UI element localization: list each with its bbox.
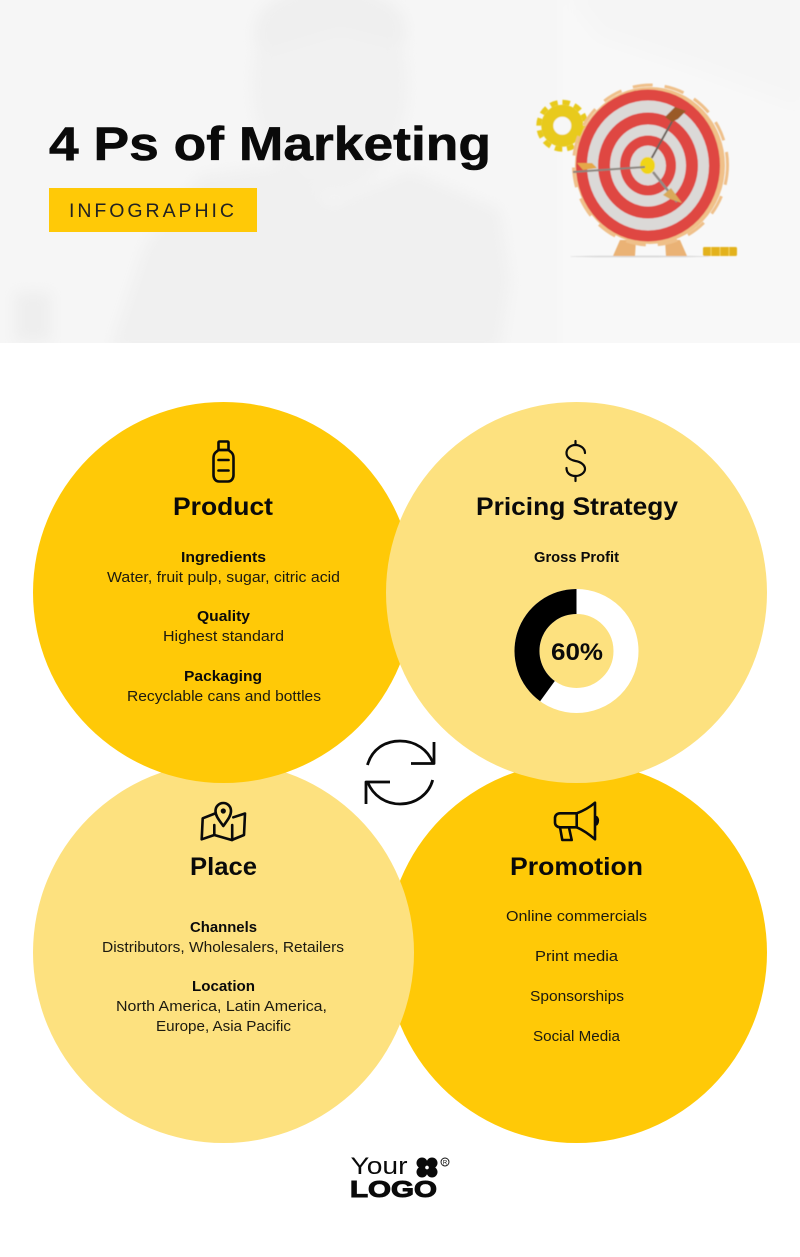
text block: product details: Packaging	[184, 669, 262, 685]
logo: R	[443, 1160, 448, 1166]
subtitle badge	[49, 188, 257, 232]
text block: promotion list: Print media	[535, 949, 619, 965]
donut chart: 60% gross profit: 60%	[551, 639, 603, 666]
panel: promotion circle	[386, 762, 767, 1143]
title: 4 Ps of Marketing	[49, 117, 491, 170]
illustration: target with arrows, gear and coins	[539, 85, 737, 258]
text block: product details: Water, fruit pulp, sugar, citric acid	[107, 570, 340, 586]
text block: product details: Highest standard	[163, 629, 284, 645]
icon: megaphone	[555, 803, 598, 840]
logo: LOGO	[350, 1176, 437, 1202]
text block: product details: Quality	[197, 609, 250, 625]
text block: place details	[102, 920, 344, 1035]
heading: place: Place	[190, 853, 257, 881]
text block: place details: Location	[192, 979, 255, 995]
heading: promotion: Promotion	[510, 853, 643, 881]
logo: Your	[350, 1153, 408, 1180]
text block: promotion list: Social Media	[533, 1029, 621, 1045]
heading: product: Product	[173, 493, 274, 521]
text block: place details: Channels	[190, 920, 257, 936]
text block: promotion list: Sponsorships	[530, 989, 624, 1005]
text block: product details	[107, 550, 340, 705]
text block: product details: Recyclable cans and bottles	[127, 689, 321, 705]
text block: place details: Distributors, Wholesalers, Retailers	[102, 940, 344, 956]
icon: bottle	[214, 442, 234, 482]
panel: product circle	[33, 402, 414, 783]
logo	[350, 1153, 449, 1202]
text block: product details: Ingredients	[181, 550, 266, 566]
subtitle badge: INFOGRAPHIC	[69, 200, 234, 222]
donut chart: 60% gross profit	[514, 589, 626, 701]
icon: dollar sign	[566, 441, 585, 481]
text block: place details: Europe, Asia Pacific	[156, 1019, 291, 1035]
heading: pricing strategy: Pricing Strategy	[476, 493, 678, 521]
header photo background	[0, 0, 800, 360]
text block: place details: North America, Latin America,	[116, 999, 327, 1015]
icon: cycle arrows	[366, 741, 434, 804]
text block: promotion list	[506, 909, 647, 1045]
text block: promotion list: Online commercials	[506, 909, 647, 925]
panel: place circle	[33, 762, 414, 1143]
panel: pricing strategy circle	[386, 402, 767, 783]
icon: map with pin	[202, 803, 245, 840]
text: gross profit: Gross Profit	[534, 550, 619, 566]
